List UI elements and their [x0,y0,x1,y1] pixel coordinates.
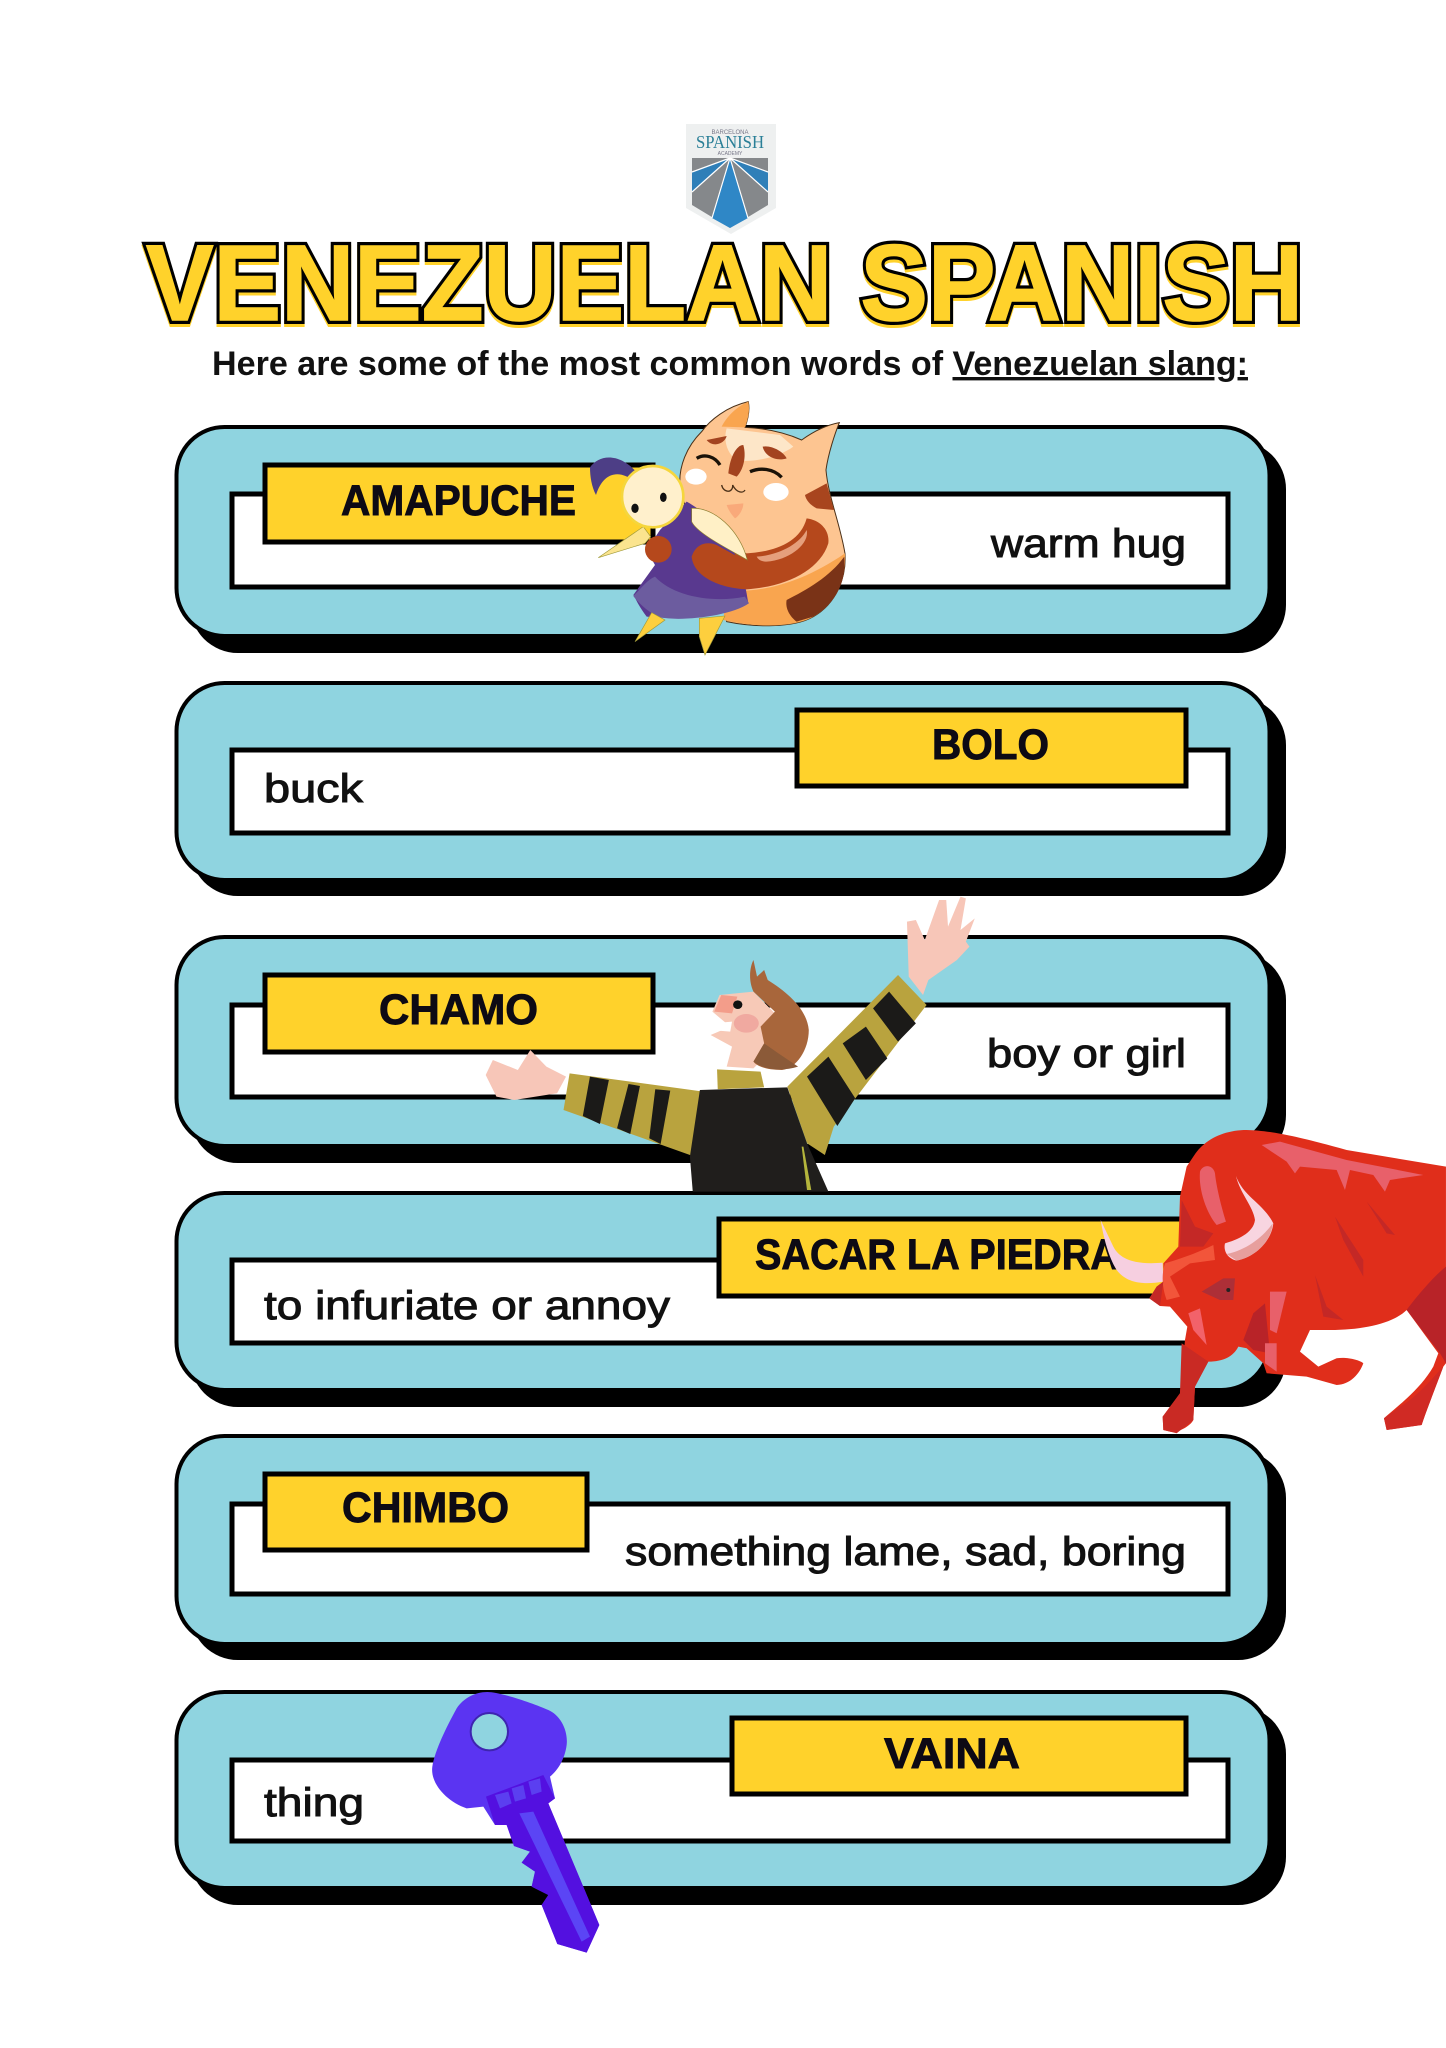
logo: shield: BARCELONA [711,130,749,136]
panel: vaina: thing [264,1781,364,1825]
panel: bolo: BOLO [932,721,1049,769]
panel: vaina [176,1692,1286,1905]
title: VENEZUELAN SPANISH [146,222,1303,343]
logo: shield: SPANISH [696,132,764,152]
panel: amapuche: AMAPUCHE [341,477,576,525]
icon: man with striped sweater [486,897,975,1192]
panel: amapuche [176,427,1286,653]
panel: chimbo: something lame, sad, boring [625,1530,1186,1574]
panel: vaina: VAINA [884,1730,1020,1778]
title: VENEZUELAN SPANISH [146,222,1303,343]
panel: amapuche: warm hug [990,522,1186,566]
panel: sacar la piedra: SACAR LA PIEDRA [755,1231,1119,1279]
logo: shield: ACADEMY [718,151,743,157]
panel: chimbo: CHIMBO [342,1484,509,1532]
panel: chamo [176,937,1286,1163]
title: VENEZUELAN SPANISH [146,225,1303,346]
panel: bolo: buck [264,767,364,811]
logo: shield [686,124,776,234]
panel: chamo: boy or girl [987,1032,1186,1076]
panel: sacar la piedra [176,1193,1286,1407]
panel: bolo [176,683,1286,896]
icon: purple key [432,1692,599,1953]
subtitle: Here are some of the most common words of Venezuelan slang: [212,345,1248,383]
panel: sacar la piedra: to infuriate or annoy [264,1284,670,1328]
icon: red bull [1101,1130,1446,1433]
panel: chimbo [176,1436,1286,1660]
icon: cat hugging doll [590,402,845,655]
panel: chamo: CHAMO [379,986,538,1034]
